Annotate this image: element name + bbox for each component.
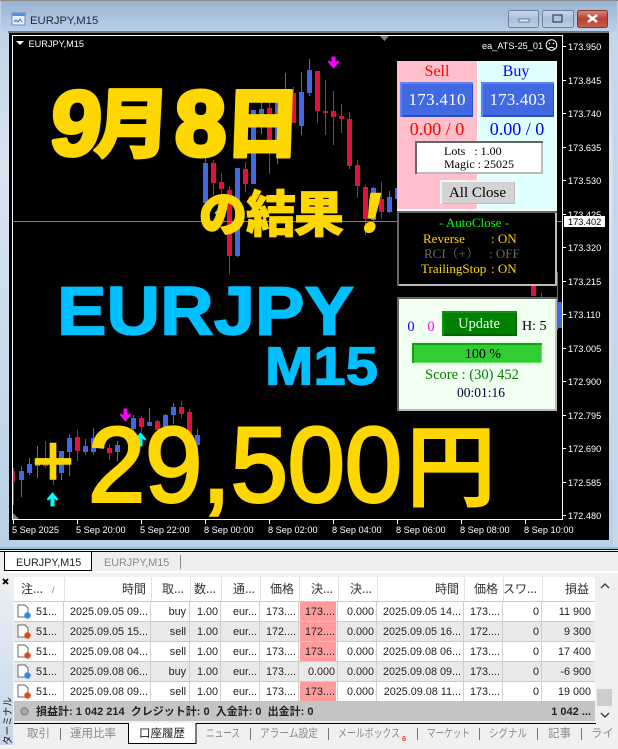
price axis: 173.005	[568, 344, 601, 354]
panel: autoclose: Reverse	[423, 231, 465, 246]
current price tag: 173.402	[568, 217, 601, 227]
terminal background	[0, 549, 618, 749]
profit amount: +	[32, 422, 74, 502]
panel: sell and buy: 173.403	[490, 90, 546, 109]
table header: 損益	[565, 580, 589, 597]
scrollbar	[596, 577, 613, 721]
chart area	[9, 33, 609, 540]
profit amount: 29,500	[88, 404, 402, 524]
time axis: 8 Sep 00:00	[204, 525, 254, 535]
panel: sell and buy: 0.00 / 0	[490, 119, 544, 139]
row 3: 0.000	[347, 646, 374, 658]
row 3: 2025.09.08 04...	[70, 646, 148, 658]
profit amount: 円	[406, 395, 496, 525]
terminal side strip: ターミナル	[0, 697, 15, 745]
table header: 時間	[435, 580, 459, 597]
row 2: 172....	[470, 626, 500, 638]
row 2: 51...	[36, 626, 57, 638]
price axis: 173.215	[568, 277, 601, 287]
table header: 数...	[194, 580, 216, 597]
row 5	[36, 686, 591, 698]
row 1: 0.000	[347, 606, 374, 618]
row 1: buy	[169, 606, 187, 618]
bottom tabs	[14, 723, 618, 744]
current price line	[13, 220, 562, 222]
panel: update and score: 100 %	[465, 347, 501, 362]
row 4: 1.00	[197, 666, 218, 678]
row 3: eur...	[233, 646, 257, 658]
bottom tabs: メールボックス	[338, 725, 400, 741]
price axis: 172.690	[568, 444, 601, 454]
row 4: 173....	[266, 666, 296, 678]
row 2: 2025.09.05 15...	[70, 626, 148, 638]
row 1: eur...	[233, 606, 257, 618]
row 1: 51...	[36, 606, 57, 618]
table header: 価格	[474, 580, 498, 597]
row 2: eur...	[233, 626, 257, 638]
row 4: 51...	[36, 666, 57, 678]
window control buttons	[508, 10, 608, 28]
row 2: 172....	[305, 626, 335, 638]
table row backgrounds	[14, 602, 595, 702]
row 2: 1.00	[197, 626, 218, 638]
panel: update and score	[397, 297, 557, 411]
row 4: -6 900	[560, 666, 591, 678]
row 3: 173....	[470, 646, 500, 658]
panel: update and score: 0	[407, 319, 415, 335]
row 3	[36, 646, 591, 658]
row 3: sell	[170, 646, 186, 658]
bottom tabs: シグナル	[489, 725, 527, 741]
bottom tabs: アラーム設定	[260, 725, 318, 741]
candlesticks: red	[13, 71, 542, 505]
panel: autoclose: TrailingStop	[421, 261, 486, 276]
row 5: 2025.09.08 11...	[384, 686, 461, 698]
table header: 決...	[350, 580, 372, 597]
price axis: 173.635	[568, 143, 601, 153]
row 3: 173....	[305, 646, 335, 658]
price axis: 173.530	[568, 176, 601, 186]
table header: 取...	[162, 580, 184, 597]
panel: autoclose: : ON	[491, 261, 517, 276]
price axis: 172.795	[568, 411, 601, 421]
title: date	[46, 63, 303, 175]
panel: update and score: Update	[458, 316, 500, 332]
price axis: 173.950	[568, 42, 601, 52]
history table	[14, 577, 595, 721]
panel: sell and buy: Lots : 1.00	[444, 144, 502, 158]
time axis	[12, 519, 574, 535]
row 4: 2025.09.08 09...	[383, 666, 461, 678]
bottom tabs: ニュース	[206, 725, 240, 741]
row 4: 0	[533, 666, 539, 678]
row 2	[36, 626, 591, 638]
price axis	[562, 42, 601, 521]
title: result	[199, 186, 403, 244]
window title: icon and name: EURJPY,M15	[30, 15, 98, 27]
row 3: 2025.09.08 06...	[383, 646, 461, 658]
row 5: 173....	[470, 686, 500, 698]
row 1: 11 900	[559, 606, 591, 618]
title: date: 月	[92, 63, 174, 173]
row 2: 0	[533, 626, 539, 638]
row 3: 1.00	[197, 646, 218, 658]
row 5: 173....	[266, 686, 296, 698]
time axis: 8 Sep 10:00	[524, 525, 574, 535]
timeframe: M15	[265, 336, 378, 396]
title: result: の	[199, 189, 247, 242]
row 1: 2025.09.05 09...	[70, 606, 148, 618]
price axis: 172.585	[568, 478, 601, 488]
panel: update and score: 0	[427, 319, 435, 335]
time axis: 5 Sep 20:00	[76, 525, 126, 535]
time axis: 8 Sep 04:00	[332, 525, 382, 535]
chart tabs: EURJPY,M15	[104, 557, 169, 569]
totals row	[14, 701, 595, 721]
row 3: 173....	[266, 646, 296, 658]
chart symbol label: EURJPY,M15	[28, 39, 84, 49]
row 4: 0.000	[347, 666, 374, 678]
row 5: 0.000	[347, 686, 374, 698]
panel: sell and buy	[397, 61, 557, 211]
row 3: 0	[533, 646, 539, 658]
title: date: 8	[175, 73, 226, 175]
price axis: 173.740	[568, 109, 601, 119]
row 5: 173....	[305, 686, 335, 698]
sell arrows	[120, 57, 338, 421]
time axis: 8 Sep 06:00	[396, 525, 446, 535]
title: date: 日	[223, 63, 303, 173]
row 1: 173....	[266, 606, 296, 618]
bottom tabs: 6	[402, 734, 406, 743]
panel: sell and buy: All Close	[449, 185, 506, 201]
panel: sell and buy: Magic : 25025	[444, 157, 514, 171]
totals row: 損益計: 1 042 214 クレジット計: 0 入金計: 0 出金計: 0	[36, 704, 314, 718]
table header: 決...	[311, 580, 333, 597]
panel: autoclose: : ON	[491, 231, 517, 246]
row 5: 19 000	[558, 686, 591, 698]
price axis: 173.110	[568, 310, 601, 320]
price axis: 172.480	[568, 511, 601, 521]
table header: 注...	[21, 580, 43, 597]
panel: autoclose: RCI（+）	[424, 246, 479, 261]
row 4: 173....	[470, 666, 500, 678]
panel: sell and buy: Sell	[425, 63, 450, 80]
terminal side strip	[0, 579, 15, 745]
row 1	[36, 606, 591, 618]
row 5: sell	[170, 686, 186, 698]
row 1: 173....	[470, 606, 500, 618]
table header	[14, 577, 595, 602]
panel: autoclose	[397, 211, 557, 286]
window frame	[0, 0, 618, 549]
row 1: 0	[533, 606, 539, 618]
table header: スワ...	[503, 580, 537, 597]
panel: sell and buy: 0.00 / 0	[410, 119, 464, 139]
panel: update and score: Score : (30) 452	[425, 367, 519, 383]
time axis: 8 Sep 02:00	[268, 525, 318, 535]
panel: update and score: 00:01:16	[457, 385, 505, 400]
bottom tabs: 取引	[27, 725, 50, 741]
time axis: 5 Sep 22:00	[140, 525, 190, 535]
row 4: buy	[169, 666, 187, 678]
row 2: 9 300	[564, 626, 591, 638]
title: result: 結	[246, 187, 296, 243]
table header: 価格	[270, 580, 294, 597]
time axis: 5 Sep 2025	[12, 525, 59, 535]
bottom tabs: 記事	[548, 725, 571, 741]
panel: update and score: H: 5	[522, 319, 546, 334]
candlesticks: blue	[19, 59, 562, 497]
row 4: eur...	[233, 666, 257, 678]
price axis: 173.425	[568, 210, 601, 220]
chart tabs: EURJPY,M15	[16, 557, 81, 569]
row 4: 0.000	[308, 666, 335, 678]
table header: /	[52, 585, 55, 595]
bottom tabs: 口座履歴	[139, 725, 185, 741]
expert advisor label: ea_ATS-25_01	[482, 41, 543, 51]
buy arrows	[48, 208, 223, 506]
row 2: 0.000	[347, 626, 374, 638]
row 4: 2025.09.08 06...	[70, 666, 148, 678]
row 1: 1.00	[197, 606, 218, 618]
panel: autoclose: - AutoClose -	[439, 215, 509, 230]
window title: icon and name	[12, 13, 98, 27]
title: result: 果	[294, 187, 344, 243]
row 2: 172....	[266, 626, 296, 638]
table header: 通...	[233, 580, 255, 597]
time axis: 8 Sep 08:00	[460, 525, 510, 535]
row 5: 0	[533, 686, 539, 698]
row 2: 2025.09.05 16...	[383, 626, 461, 638]
row 3: 51...	[36, 646, 57, 658]
bottom tabs: マーケット	[427, 725, 470, 741]
panel: autoclose: : OFF	[489, 246, 520, 261]
totals row: 1 042 ...	[551, 706, 591, 718]
row 5: 2025.09.08 09...	[70, 686, 148, 698]
price axis: 173.320	[568, 243, 601, 253]
price axis: 173.845	[568, 76, 601, 86]
row 5: eur...	[233, 686, 257, 698]
title: result: ！	[341, 186, 403, 244]
panel: sell and buy: 173.410	[408, 90, 466, 109]
row 1: 2025.09.05 14...	[383, 606, 461, 618]
row 5: 1.00	[197, 686, 218, 698]
chart tabs	[4, 552, 180, 570]
price axis: 172.900	[568, 377, 601, 387]
row 1: 173....	[305, 606, 335, 618]
profit amount	[32, 395, 496, 525]
bottom tabs: 運用比率	[70, 725, 116, 741]
row 2: sell	[170, 626, 186, 638]
table header: 時間	[122, 580, 146, 597]
row 3: 17 400	[558, 646, 591, 658]
currency pair: EURJPY	[57, 272, 354, 350]
row 5: 51...	[36, 686, 57, 698]
row 4	[36, 666, 591, 678]
title: date: 9	[46, 72, 106, 175]
right edge	[613, 573, 618, 749]
panel: sell and buy: Buy	[503, 63, 529, 80]
order icons	[18, 605, 31, 699]
